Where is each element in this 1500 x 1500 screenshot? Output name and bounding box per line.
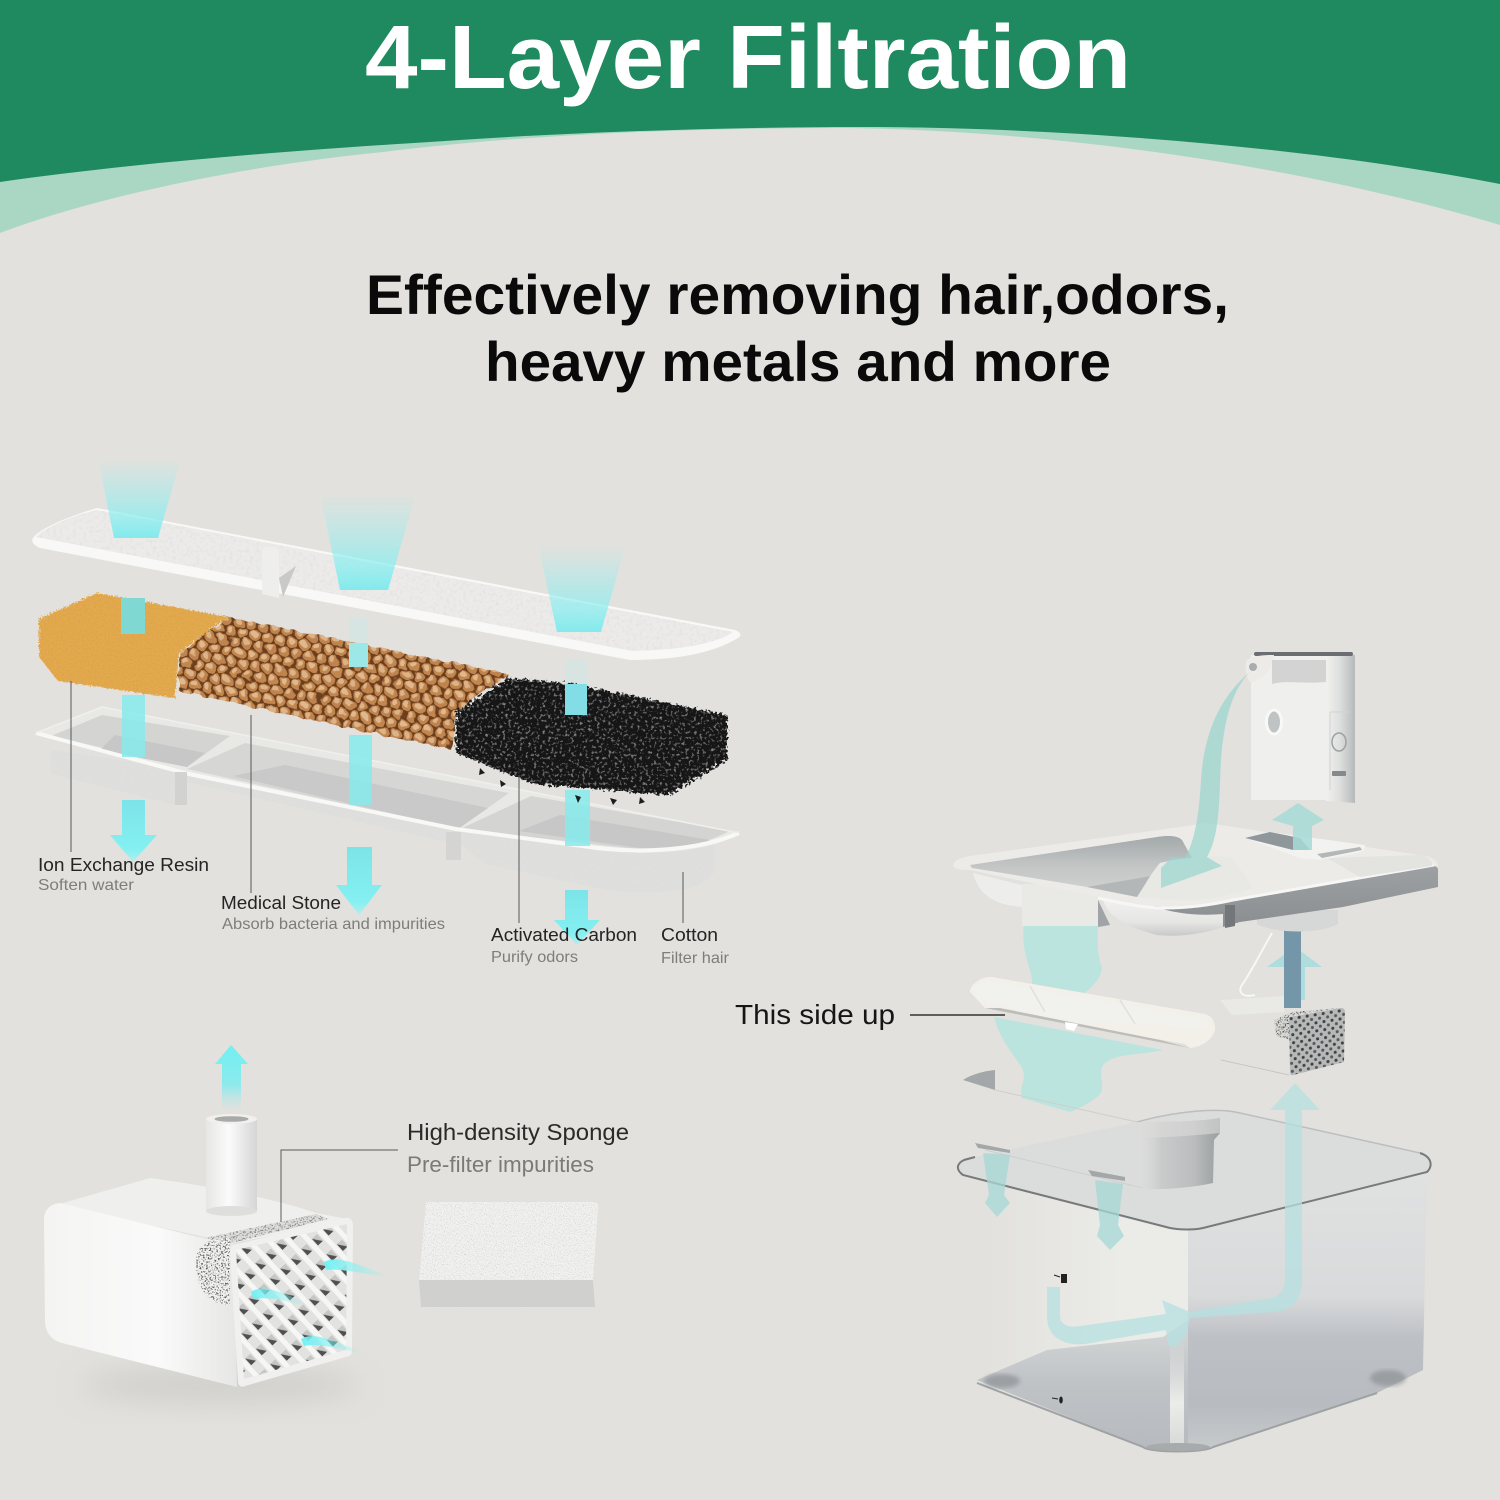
pump shadow: [80, 1367, 360, 1403]
pump body: [44, 1178, 352, 1387]
wedge: [1098, 900, 1110, 927]
label: cotton: [661, 924, 730, 967]
clips: [975, 1143, 1125, 1181]
arrow: up to tower: [1272, 803, 1324, 850]
bowl cavity: [970, 836, 1192, 897]
layer: medical stone: [179, 617, 509, 750]
panel: layered filter cartridge: [32, 458, 740, 967]
bowl underside: [1103, 900, 1228, 936]
label: activated carbon: Purify odors: [491, 949, 578, 966]
beams through the tray: [122, 695, 590, 846]
leader line: sponge: [281, 1150, 398, 1222]
tray insert: [963, 1070, 1220, 1189]
sponge block: [419, 1202, 598, 1307]
arrow: water out up: [215, 1045, 248, 1110]
label: activated carbon: [491, 924, 637, 966]
tank base: [977, 1320, 1188, 1447]
label: cotton: Cotton: [661, 924, 718, 945]
label: medical stone: Absorb bacteria and impurities: [222, 916, 445, 933]
arrows: flow down into tank: [983, 1153, 1124, 1250]
label: cotton: Filter hair: [661, 950, 730, 967]
label: high-density sponge: Pre-filter impurities: [407, 1152, 594, 1177]
label: high-density sponge: High-density Sponge: [407, 1119, 629, 1145]
subtitle: Effectively removing hair,odors,: [366, 263, 1229, 326]
water blob: upper: [1023, 923, 1102, 998]
bowl floor: [1087, 875, 1157, 897]
label: high-density sponge: [407, 1119, 629, 1177]
right slightly grey plate: [1327, 855, 1432, 877]
spout mound: [1137, 856, 1253, 900]
arrow: circulation through tank: [1047, 1083, 1320, 1348]
tray top surface: [953, 823, 1438, 907]
tower: [1246, 652, 1355, 803]
gap in rim: [1022, 884, 1098, 926]
arrows: water flowing down: [110, 800, 600, 945]
tank: [958, 1110, 1431, 1452]
header banner: [0, 0, 1500, 233]
outlet tube: [206, 1114, 257, 1216]
lattice grill: [230, 1218, 353, 1387]
panel: fountain exploded view: [953, 652, 1438, 1452]
beams visible through the media: [121, 598, 587, 715]
arrow: water out of spout: [1161, 672, 1250, 888]
cotton filter with this side up: [970, 977, 1215, 1048]
label: ion exchange resin: Ion Exchange Resin: [38, 854, 209, 875]
subtitle: heavy metals and more: [485, 330, 1111, 393]
panel: pump with sponge: [44, 1045, 629, 1403]
layer: activated carbon: [456, 678, 727, 805]
layer: tray: [36, 707, 739, 892]
tank rim: [958, 1110, 1431, 1230]
layer: top cotton pad: [32, 508, 740, 660]
layer: ion exchange resin: [39, 593, 228, 698]
small perforated pump: [1220, 996, 1345, 1075]
tower socket: [1245, 832, 1365, 860]
title: 4-Layer Filtration: [365, 8, 1131, 108]
label: ion exchange resin: Soften water: [38, 877, 135, 894]
power wire: [1240, 933, 1272, 996]
front rim: [1153, 866, 1438, 927]
marks on tank: [1052, 1274, 1067, 1404]
arrow: behind column: [1267, 947, 1322, 1000]
arrows: water in: [251, 1259, 392, 1355]
sponge strip and side: [196, 1214, 328, 1305]
pump column: [1284, 930, 1301, 1008]
label: ion exchange resin: [38, 854, 209, 894]
collar: [1257, 910, 1338, 932]
tray underside left: [973, 873, 1022, 907]
label: activated carbon: Activated Carbon: [491, 924, 637, 945]
label: medical stone: [221, 892, 445, 933]
top tray: [953, 823, 1438, 936]
water beams above the pad: [98, 458, 626, 685]
leader lines: [71, 681, 683, 923]
label: this side up: This side up: [735, 999, 895, 1030]
water blob: lower: [994, 1017, 1163, 1112]
label: medical stone: Medical Stone: [221, 892, 341, 913]
subtitle: [366, 263, 1229, 393]
